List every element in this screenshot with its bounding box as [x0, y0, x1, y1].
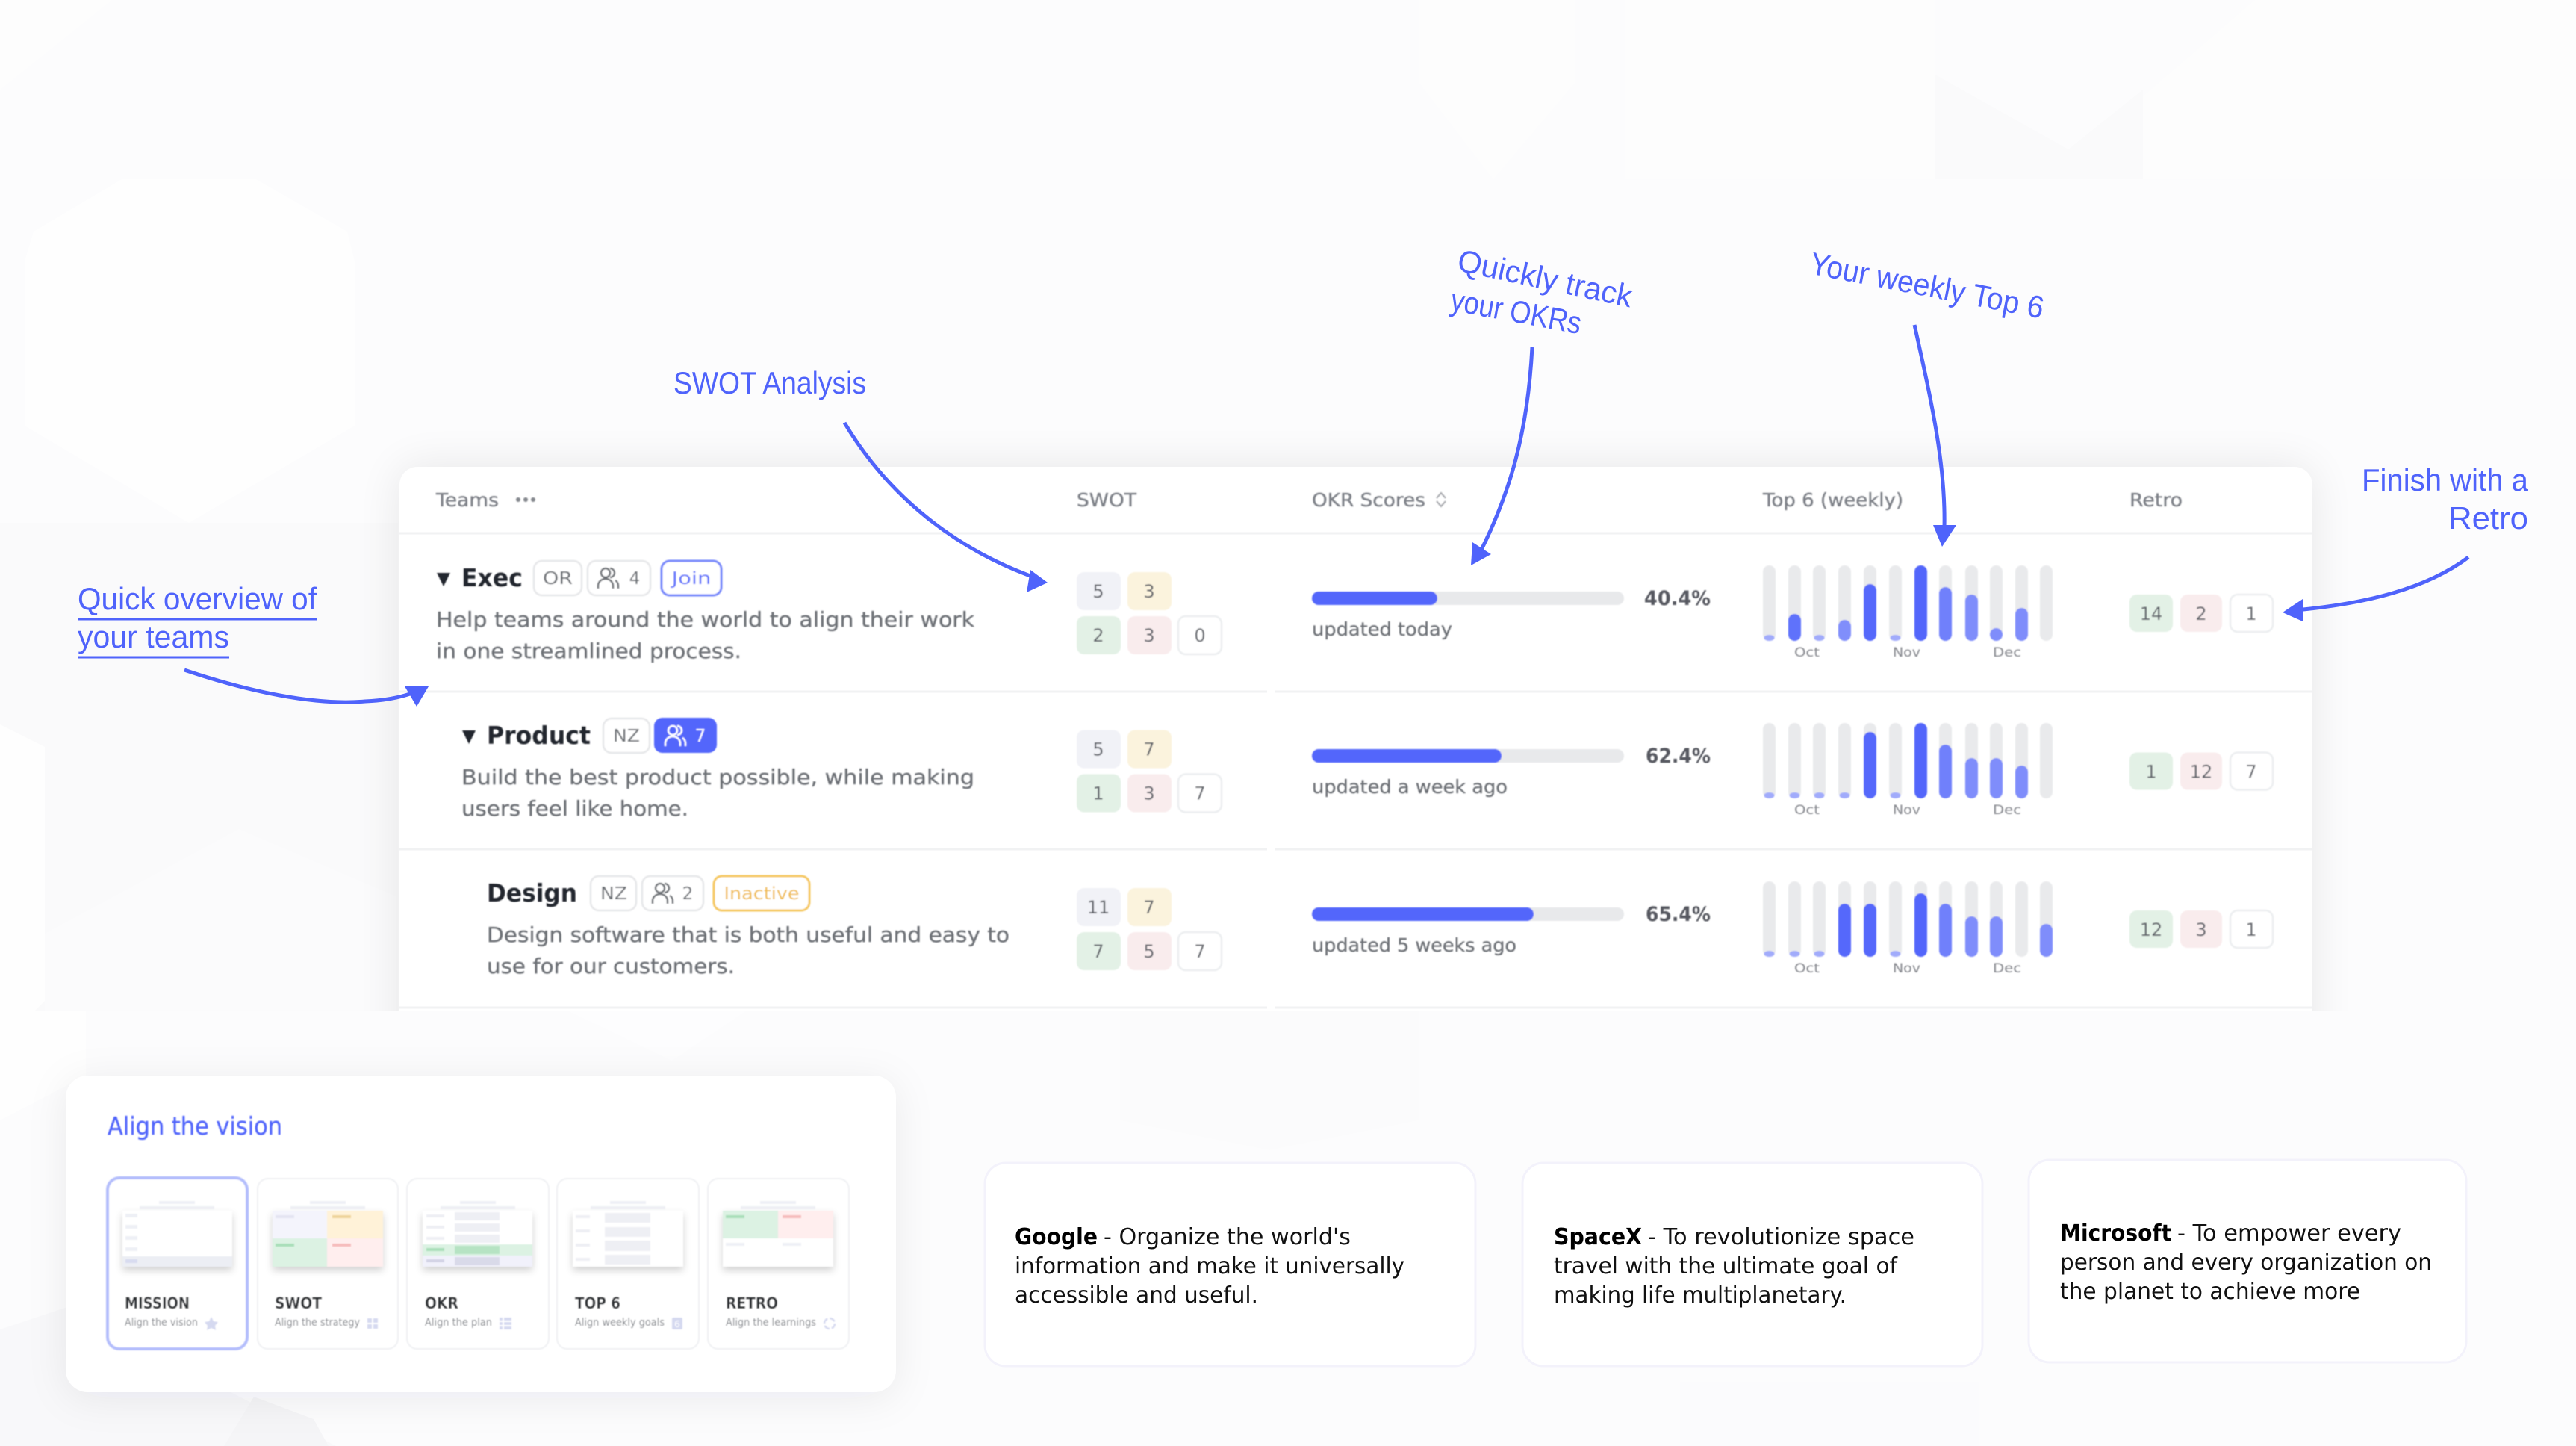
SWOT scores: Exec: 3 — [1143, 581, 1155, 602]
weekly bars chart: Product: Dec — [1993, 803, 2021, 818]
weekly bars chart: Exec: Dec — [1993, 645, 2021, 660]
weekly bars chart: Product: Nov — [1893, 803, 1920, 818]
retro scores: Design: 12 — [2140, 919, 2162, 940]
heading: align the vision: Align the vision — [108, 1111, 282, 1141]
weekly bars chart: Design: Nov — [1893, 961, 1920, 976]
retro scores: Design — [2129, 910, 2273, 948]
table panel — [399, 467, 2312, 1064]
mission card: Google — [985, 1163, 1475, 1366]
SWOT scores: Product: 1 — [1092, 783, 1104, 804]
card: mission: MISSION — [125, 1294, 190, 1312]
card: swot: Align the strategy — [275, 1317, 360, 1329]
SWOT scores: Exec: 0 — [1194, 625, 1206, 646]
retro scores: Exec — [2129, 595, 2273, 632]
card: swot: SWOT — [275, 1294, 323, 1312]
team row: Design: 2 — [682, 884, 693, 904]
mission card: Microsoft — [2029, 1160, 2466, 1362]
SWOT scores: Product: 3 — [1143, 783, 1155, 804]
table header row: Retro — [2129, 489, 2183, 511]
retro scores: Product: 7 — [2245, 762, 2257, 783]
SWOT scores: Product: 7 — [1194, 783, 1206, 804]
team row: Design: Design — [487, 878, 577, 907]
annotation: Quickly track your OKRs: Quickly track — [1455, 243, 1637, 314]
arrow: to Top 6 column — [1914, 325, 1956, 547]
arrow: to Retro column — [2283, 557, 2468, 621]
SWOT scores: Design — [1077, 888, 1222, 970]
annotation: Your weekly Top 6: Your weekly Top 6 — [1807, 246, 2047, 326]
card: top 6 — [557, 1179, 699, 1349]
team row: Exec: Join — [670, 569, 711, 589]
OKR score: Design — [1312, 903, 1711, 956]
retro scores: Design: 3 — [2195, 919, 2207, 940]
team row: Design: NZ — [600, 884, 627, 904]
retro scores: Design: 1 — [2245, 919, 2257, 940]
annotation: quick overview of your teams: your teams — [78, 619, 229, 654]
OKR score: Product: 62.4% — [1646, 745, 1711, 768]
mission card: Google: - Organize the world's — [1104, 1224, 1351, 1250]
card: mission: Align the vision — [125, 1317, 198, 1329]
mission card: Microsoft: - To empower every — [2177, 1220, 2401, 1247]
retro scores: Exec: 2 — [2195, 603, 2207, 624]
card: okr: Align the plan — [425, 1317, 492, 1329]
OKR score: Design: updated 5 weeks ago — [1312, 934, 1516, 956]
card: top 6: TOP 6 — [575, 1294, 620, 1312]
annotation: SWOT Analysis: SWOT Analysis — [673, 365, 866, 400]
arrow: to teams column — [184, 670, 429, 707]
weekly bars chart: Exec: Nov — [1893, 645, 1920, 660]
SWOT scores: Design: 5 — [1143, 941, 1155, 962]
card: top 6: Align weekly goals — [575, 1317, 665, 1329]
weekly bars chart: Design — [1763, 881, 2053, 976]
team row: Design: Inactive — [724, 884, 799, 904]
team row: Design — [487, 876, 1009, 978]
team row: Exec: Help teams around the world to align their work — [436, 607, 975, 632]
SWOT scores: Exec: 2 — [1092, 625, 1104, 646]
mission card: SpaceX: - To revolutionize space — [1648, 1224, 1914, 1250]
SWOT scores: Product — [1077, 730, 1222, 813]
SWOT scores: Product: 5 — [1092, 739, 1104, 760]
SWOT scores: Design: 7 — [1143, 897, 1155, 918]
card: retro: Align the learnings — [726, 1317, 816, 1329]
weekly bars chart: Exec — [1763, 565, 2053, 660]
mission card: Microsoft: person and every organization on — [2060, 1250, 2432, 1276]
card: retro: RETRO — [726, 1294, 778, 1312]
annotation: Finish with a Retro — [2362, 462, 2529, 536]
mission card: Microsoft: Microsoft — [2060, 1220, 2171, 1247]
mission card: SpaceX — [1522, 1163, 1982, 1366]
mission card: Microsoft: the planet to achieve more — [2060, 1279, 2360, 1305]
SWOT scores: Product: 7 — [1143, 739, 1155, 760]
weekly bars chart: Product: Oct — [1794, 803, 1820, 818]
panel: align the vision — [66, 1076, 896, 1392]
OKR score: Exec: updated today — [1312, 618, 1452, 640]
table header row: SWOT — [1077, 489, 1137, 511]
mission card: SpaceX: making life multiplanetary. — [1554, 1282, 1847, 1309]
OKR score: Design: 65.4% — [1646, 903, 1711, 926]
annotation: quick overview of your teams — [78, 581, 317, 657]
card: retro — [708, 1179, 849, 1349]
team row: Exec: 4 — [629, 569, 640, 589]
table header row — [435, 489, 2183, 511]
retro scores: Product — [2129, 753, 2273, 790]
team row: Product: 7 — [695, 727, 706, 746]
team row: Exec — [436, 561, 975, 663]
card: swot — [258, 1179, 398, 1349]
mission card: Google: Google — [1015, 1224, 1098, 1250]
team row: Design: Design software that is both useful and easy to — [487, 922, 1009, 947]
mission card: SpaceX: travel with the ultimate goal of — [1554, 1253, 1898, 1279]
retro scores: Product: 12 — [2190, 762, 2212, 783]
weekly bars chart: Design: Oct — [1794, 961, 1820, 976]
OKR score: Exec — [1312, 587, 1711, 640]
mission card: Google: information and make it universally — [1015, 1253, 1404, 1279]
team row: Product: Build the best product possible, while making — [461, 765, 974, 789]
team row: Product: NZ — [613, 727, 640, 746]
SWOT scores: Design: 7 — [1092, 941, 1104, 962]
team row: Exec: OR — [543, 569, 573, 589]
SWOT scores: Design: 11 — [1087, 897, 1110, 918]
mission card: SpaceX: SpaceX — [1554, 1224, 1642, 1250]
team row: Design: use for our customers. — [487, 954, 735, 978]
retro scores: Product: 1 — [2145, 762, 2157, 783]
weekly bars chart: Exec: Oct — [1794, 645, 1820, 660]
annotation: quick overview of your teams: Quick overview of — [78, 581, 317, 616]
table header row: Top 6 (weekly) — [1762, 489, 1903, 511]
annotation: Quickly track your OKRs: your OKRs — [1448, 282, 1584, 341]
OKR score: Product: updated a week ago — [1312, 776, 1508, 798]
SWOT scores: Design: 7 — [1194, 941, 1206, 962]
team row: Product — [461, 718, 974, 821]
table header row: OKR Scores — [1312, 489, 1425, 511]
team row: Product: Product — [487, 721, 591, 750]
team row: Product: users feel like home. — [461, 796, 688, 821]
SWOT scores: Exec — [1077, 572, 1222, 654]
annotation: Finish with a Retro: Finish with a — [2362, 462, 2529, 497]
card: mission — [108, 1178, 247, 1349]
card: okr: OKR — [425, 1294, 458, 1312]
OKR score: Exec: 40.4% — [1644, 587, 1711, 610]
team row: Exec: Exec — [461, 563, 523, 592]
weekly bars chart: Design: Dec — [1993, 961, 2021, 976]
arrow: to SWOT column — [844, 423, 1048, 592]
team row: Exec: in one streamlined process. — [436, 639, 741, 663]
retro scores: Exec: 1 — [2245, 603, 2257, 624]
mission card: Google: accessible and useful. — [1015, 1282, 1258, 1309]
annotation: Finish with a Retro: Retro — [2448, 500, 2528, 536]
SWOT scores: Exec: 5 — [1092, 581, 1104, 602]
retro scores: Exec: 14 — [2140, 603, 2162, 624]
arrow: to OKR column — [1471, 347, 1532, 565]
card: okr — [407, 1179, 549, 1349]
card: top 6: 6 — [674, 1319, 680, 1329]
weekly bars chart: Product — [1763, 723, 2053, 818]
table header row: Teams — [435, 489, 499, 511]
OKR score: Product — [1312, 745, 1711, 798]
SWOT scores: Exec: 3 — [1143, 625, 1155, 646]
